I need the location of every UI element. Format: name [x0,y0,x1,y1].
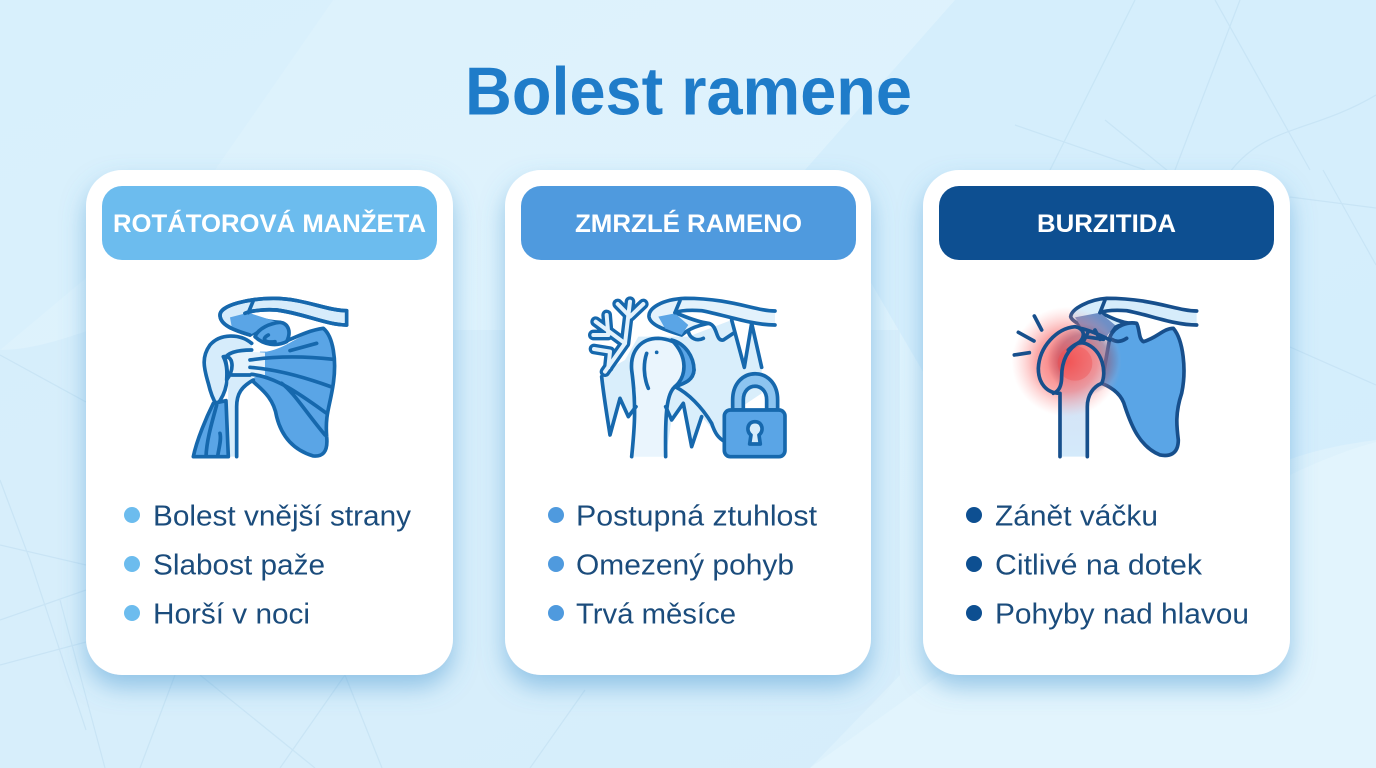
header: rotátorová manžeta: ROTÁTOROVÁ MANŽETA [113,208,426,238]
header: zmrzlé rameno: ZMRZLÉ RAMENO [575,209,802,238]
bullet list: Zánět váčku [995,500,1158,532]
bullet list: Horší v noci [153,598,310,630]
bullet list: Slabost paže [153,550,325,582]
icon: shoulder with rotator cuff [193,298,347,457]
icon: frozen shoulder with snowflake and padlock [593,298,785,457]
bullet list: Omezený pohyb [576,550,794,582]
panel: burzitida [923,170,1290,675]
icon: inflamed shoulder bursa [1012,298,1197,457]
bullet list: Postupná ztuhlost [576,500,817,532]
panel: rotátorová manžeta [86,170,453,675]
bullet list: Trvá měsíce [576,598,736,630]
header: burzitida [939,186,1274,260]
title: Bolest ramene [465,54,912,130]
header: rotátorová manžeta [102,186,437,260]
bullet list [966,500,1249,630]
bullet list: Bolest vnější strany [153,500,412,532]
bullet list [124,500,412,630]
bullet list: Citlivé na dotek [995,550,1203,582]
bullet list [548,500,817,630]
panel: zmrzlé rameno [505,170,871,675]
header: burzitida: BURZITIDA [1037,210,1176,238]
bullet list: Pohyby nad hlavou [995,598,1249,630]
header: zmrzlé rameno [521,186,856,260]
